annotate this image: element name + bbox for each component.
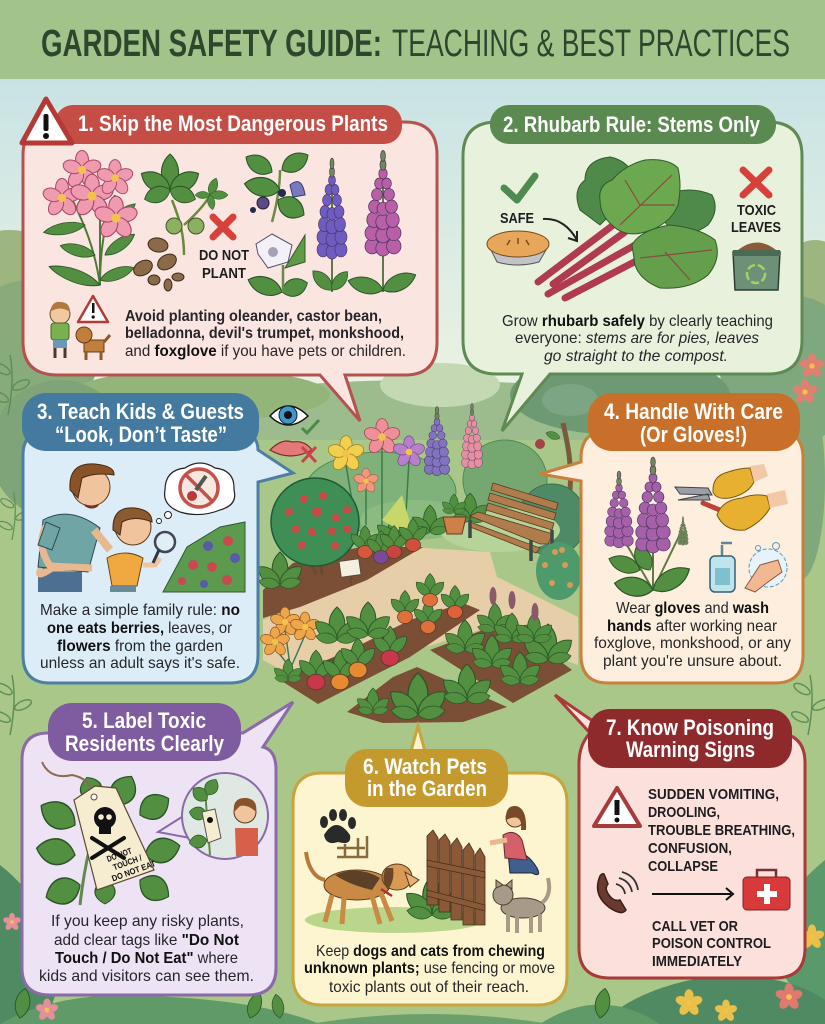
warning sign list: CONFUSION, [648,840,732,857]
icon: paw print [320,809,356,843]
call to action text: CALL VET OR [652,918,738,935]
garden: orange flowers [259,607,321,683]
body text: add clear tags like "Do Not [54,932,240,949]
bubble [463,122,802,431]
tag text [103,839,158,883]
body text [39,913,254,985]
plant: oleander [41,150,139,291]
illustration: rhubarb bunch [538,157,717,298]
icon: safe check mark [504,176,535,200]
garden: tree and shrubs [304,384,598,556]
garden: wooden bench [470,483,558,561]
tag text: DO NOT EAT [110,858,158,883]
body text: foxglove, monkshood, or any [594,635,791,652]
header text: 4. Handle With Care [604,399,783,424]
body text: Make a simple family rule: no [40,602,240,619]
garden: soil beds [280,603,572,723]
illustration: inset of child reading tag [158,773,268,859]
header text: Residents Clearly [65,731,225,756]
header text: “Look, Don’t Taste” [55,422,227,447]
body text: unknown plants; use fencing or move [304,960,555,977]
panel 7: poisoning warning signs [555,695,805,978]
body text: If you keep any risky plants, [51,913,244,930]
label: do not plant: DO NOT [199,247,249,264]
body text: Grow rhubarb safely by clearly teaching [502,313,773,330]
icon: look don't taste eye and lips [270,406,319,462]
header text: (Or Gloves!) [640,422,747,447]
body text: plant you're unsure about. [603,653,782,670]
icon: child and dog [50,302,110,360]
plant: belladonna [242,148,312,224]
bubble [293,726,567,1005]
illustration: father [38,464,114,592]
central garden illustration [254,384,598,723]
warning sign list: TROUBLE BREATHING, [648,822,795,839]
illustration: grass ground [305,907,485,933]
illustration: foxgloves [605,457,694,599]
icon: compost bin [733,242,780,290]
garden: leafy greens [354,587,576,721]
header pill [55,105,402,144]
body text: flowers from the garden [57,638,223,655]
label: toxic leaves: TOXIC [737,202,776,219]
label: toxic leaves: LEAVES [731,219,781,236]
panel 1: skip dangerous plants [22,99,437,421]
illustration: tabby cat [493,878,549,933]
body text: hands after working near [607,618,778,635]
garden: path [263,548,578,680]
body text: Avoid planting oleander, castor bean, [125,308,382,325]
illustration: leafy plant [34,770,183,909]
icon: pie [487,231,549,265]
body text: kids and visitors can see them. [39,968,254,985]
body text: Touch / Do Not Eat" where [55,950,238,967]
illustration: warning tag with string [42,762,158,890]
garden: potted plant [440,494,468,534]
label: toxic leaves [731,202,781,236]
icon: warning triangle [22,99,72,143]
icon: small warning triangle [78,296,108,322]
header text: 1. Skip the Most Dangerous Plants [78,111,388,136]
garden: fruit bush [254,478,359,590]
body text: Keep dogs and cats from chewing [316,943,545,960]
panel 6: watch pets [293,726,567,1005]
illustration: plant near fence [402,876,462,921]
bubble [555,695,805,978]
bubble [540,430,803,683]
garden: tall flowers [327,403,491,544]
label: do not plant: PLANT [202,265,246,282]
icon: telephone with signal [598,872,638,913]
tag text: TOUCH / [112,852,144,872]
call to action text: IMMEDIATELY [652,953,742,970]
header text [37,399,244,447]
label: safe: SAFE [500,210,534,227]
title banner [0,0,825,79]
label: do not plant [199,247,249,282]
header text: Warning Signs [626,737,755,762]
panel 3: teach kids and guests [22,393,293,683]
header text: 6. Watch Pets [363,754,487,779]
panel 2: rhubarb rule [463,105,802,431]
body text: belladonna, devil's trumpet, monkshood, [125,325,404,342]
header pill [22,393,259,451]
body text: go straight to the compost. [544,348,728,365]
header text [604,399,783,447]
garden: back bed vegetables [348,518,430,564]
icon: small fence sign [337,836,367,857]
illustration: wooden fence [427,830,485,925]
header text: in the Garden [367,776,487,801]
warning sign list: COLLAPSE [648,858,718,875]
icon: hand soap bottle [710,543,735,592]
warning sign list: SUDDEN VOMITING, [648,786,779,803]
bubble [23,430,293,683]
illustration: thought bubble with no-berries sign [156,463,235,524]
garden: round flowering bush [536,542,582,600]
header text [606,715,774,762]
header text: 3. Teach Kids & Guests [37,399,244,424]
body text: unless an adult says it's safe. [40,655,240,672]
icon: first aid kit [743,870,790,910]
body text: toxic plants out of their reach. [329,979,529,996]
header pill [345,749,508,807]
garden: back soil bed [263,547,423,618]
icon: toxic cross [743,170,769,195]
call to action text: POISON CONTROL [652,935,771,952]
header pill [588,393,800,451]
call to action text [652,918,771,970]
header pill [48,703,241,761]
warning sign list: DROOLING, [648,804,720,821]
body text: one eats berries, leaves, or [47,620,233,637]
body text [594,600,791,670]
garden: plant sign [339,559,361,586]
tag text: DO NOT [105,845,134,864]
body text [502,313,773,365]
title banner: GARDEN SAFETY GUIDE: [41,23,382,65]
body text: and foxglove if you have pets or children. [125,343,406,360]
icon: warning triangle [594,788,640,826]
header text [65,708,225,756]
header text: 2. Rhubarb Rule: Stems Only [503,112,761,137]
header pill [490,105,776,144]
panel 5: label toxic residents [22,702,293,995]
arrow: phone to first aid [652,888,733,900]
header pill [588,709,792,768]
bubble [22,702,293,995]
illustration: woman kneeling [490,806,539,875]
body text [304,943,555,996]
bubble [23,122,437,421]
illustration: berry bush [163,522,245,592]
background sprigs and flowers [0,353,825,1023]
arrow: safe to stems [543,219,577,241]
plant: foxglove [346,150,419,298]
plant: monkshood [308,158,352,295]
body text [125,308,406,360]
header text: 7. Know Poisoning [606,715,774,740]
warning sign list [648,786,795,875]
body text: everyone: stems are for pies, leaves [515,330,759,347]
icon: skull and crossbones [92,807,124,858]
illustration: gloved hands with pruners [675,464,788,530]
plant: devil's trumpet [245,234,310,300]
illustration: dog [306,852,419,924]
panel 4: handle with care [540,393,803,683]
header text [363,754,487,801]
body text [40,602,240,672]
icon: washing hands [745,542,787,592]
header text: 5. Label Toxic [82,708,206,733]
illustration: boy with magnifier [107,508,175,592]
body text: Wear gloves and wash [616,600,769,617]
icon: red do-not-plant cross [213,217,233,237]
garden: vegetable rows [296,574,472,690]
plant: castor bean with seeds [131,154,228,291]
